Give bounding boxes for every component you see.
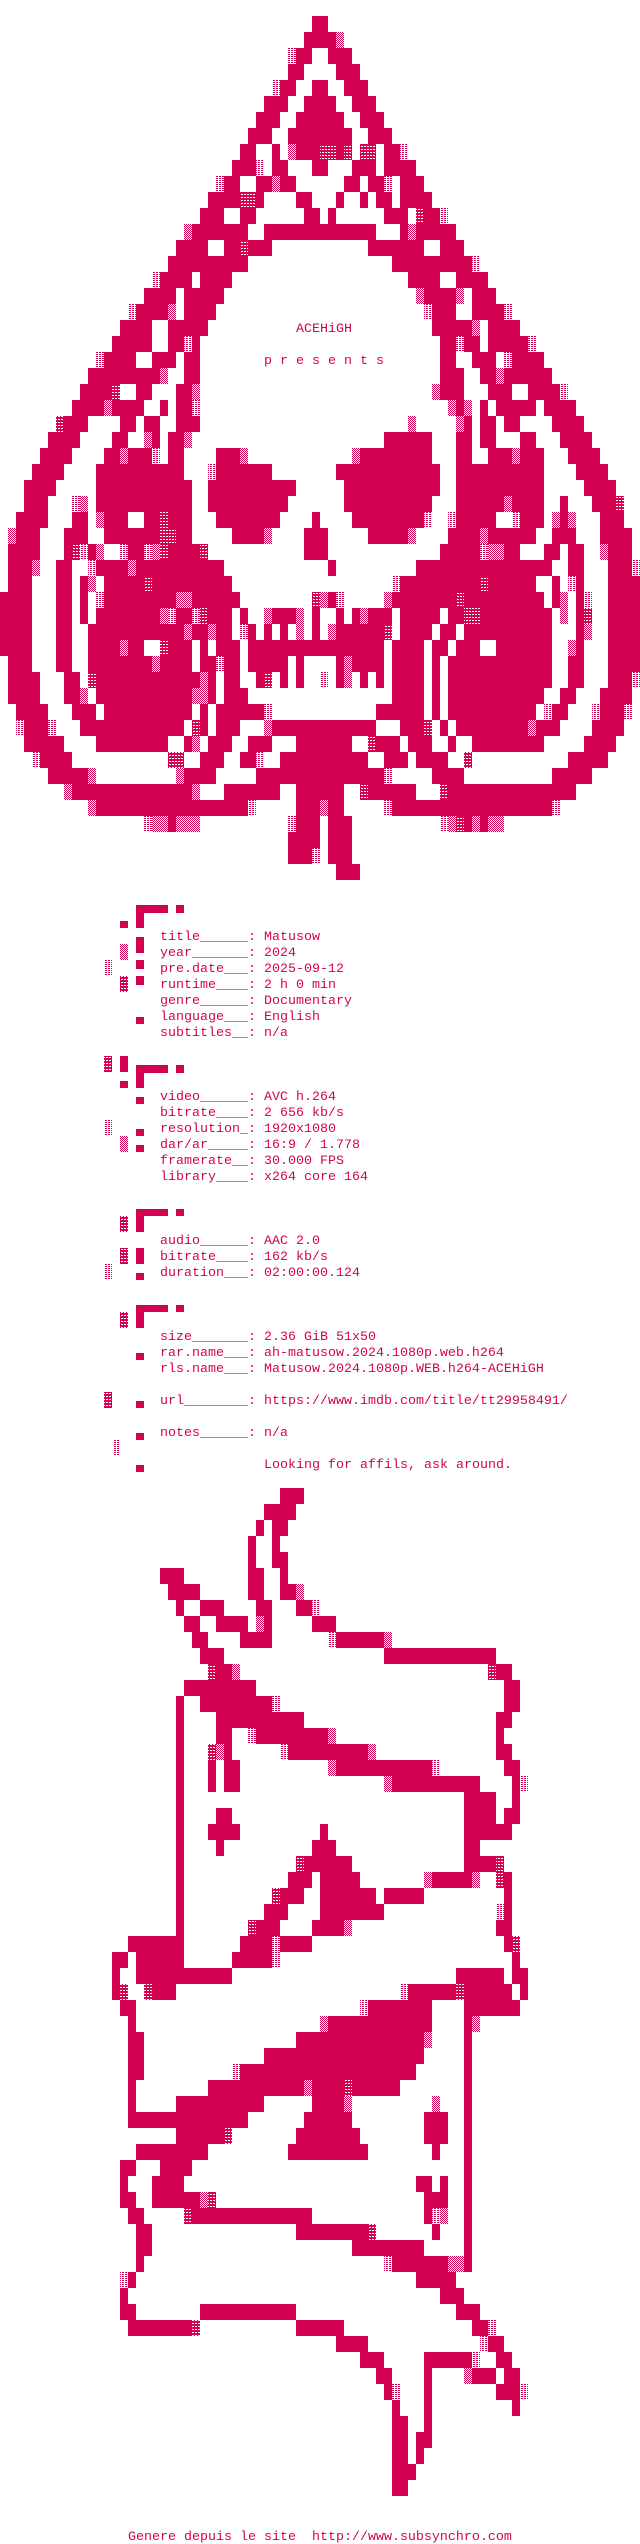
- general metadata lines: language___: English: [160, 1010, 320, 1025]
- video metadata lines: bitrate____: 2 656 kb/s: [160, 1106, 344, 1121]
- general metadata lines: genre______: Documentary: [160, 994, 352, 1009]
- video metadata lines: video______: AVC h.264: [160, 1090, 336, 1105]
- general metadata lines: [160, 930, 352, 1041]
- general metadata lines: pre.date___: 2025-09-12: [160, 962, 344, 977]
- general metadata lines: title______: Matusow: [160, 930, 320, 945]
- presents line: p r e s e n t s: [264, 354, 384, 369]
- light shade cells: [16, 56, 640, 856]
- release metadata lines: url________: https://www.imdb.com/title/tt29958491/: [160, 1394, 568, 1409]
- audio metadata lines: bitrate____: 162 kb/s: [160, 1250, 328, 1265]
- release metadata lines: size_______: 2.36 GiB 51x50: [160, 1330, 376, 1345]
- video metadata lines: resolution_: 1920x1080: [160, 1122, 336, 1137]
- general metadata lines: runtime____: 2 h 0 min: [160, 978, 336, 993]
- general metadata lines: subtitles__: n/a: [160, 1026, 288, 1041]
- light shade cells: [120, 1608, 528, 2392]
- info section: release: [104, 1305, 568, 1473]
- release metadata lines: notes______: n/a: [160, 1426, 288, 1441]
- block ornament: general: [105, 905, 184, 1024]
- block ornament: audio: [105, 1209, 184, 1280]
- skeleton knight block art: [112, 1496, 528, 2488]
- general metadata lines: year_______: 2024: [160, 946, 296, 961]
- release metadata lines: rar.name___: ah-matusow.2024.1080p.web.h264: [160, 1346, 504, 1361]
- audio metadata lines: duration___: 02:00:00.124: [160, 1266, 360, 1281]
- video metadata lines: [160, 1090, 368, 1185]
- medium shade cells: [200, 1592, 480, 2376]
- release metadata lines: Looking for affils, ask around.: [264, 1458, 512, 1473]
- spade skull block art: [0, 24, 640, 872]
- solid blocks of figure: [112, 1496, 528, 2488]
- dark shade cells: [56, 152, 624, 824]
- video metadata lines: dar/ar_____: 16:9 / 1.778: [160, 1138, 360, 1153]
- block ornament: video: [104, 1056, 184, 1152]
- medium shade cells: [8, 40, 608, 824]
- release metadata lines: [160, 1330, 568, 1473]
- audio metadata lines: audio______: AAC 2.0: [160, 1234, 320, 1249]
- dark shade cells: [120, 1672, 520, 2328]
- info section: audio: [105, 1209, 360, 1281]
- video metadata lines: library____: x264 core 164: [160, 1170, 368, 1185]
- solid blocks of spade and skull: [0, 24, 640, 872]
- block ornament: release: [104, 1305, 184, 1472]
- group name ACEHiGH: ACEHiGH: [296, 322, 352, 337]
- video metadata lines: framerate__: 30.000 FPS: [160, 1154, 344, 1169]
- audio metadata lines: [160, 1234, 360, 1281]
- release metadata lines: rls.name___: Matusow.2024.1080p.WEB.h264-ACEHiGH: [160, 1362, 544, 1377]
- info section: general: [105, 905, 352, 1041]
- info section: video: [104, 1056, 368, 1185]
